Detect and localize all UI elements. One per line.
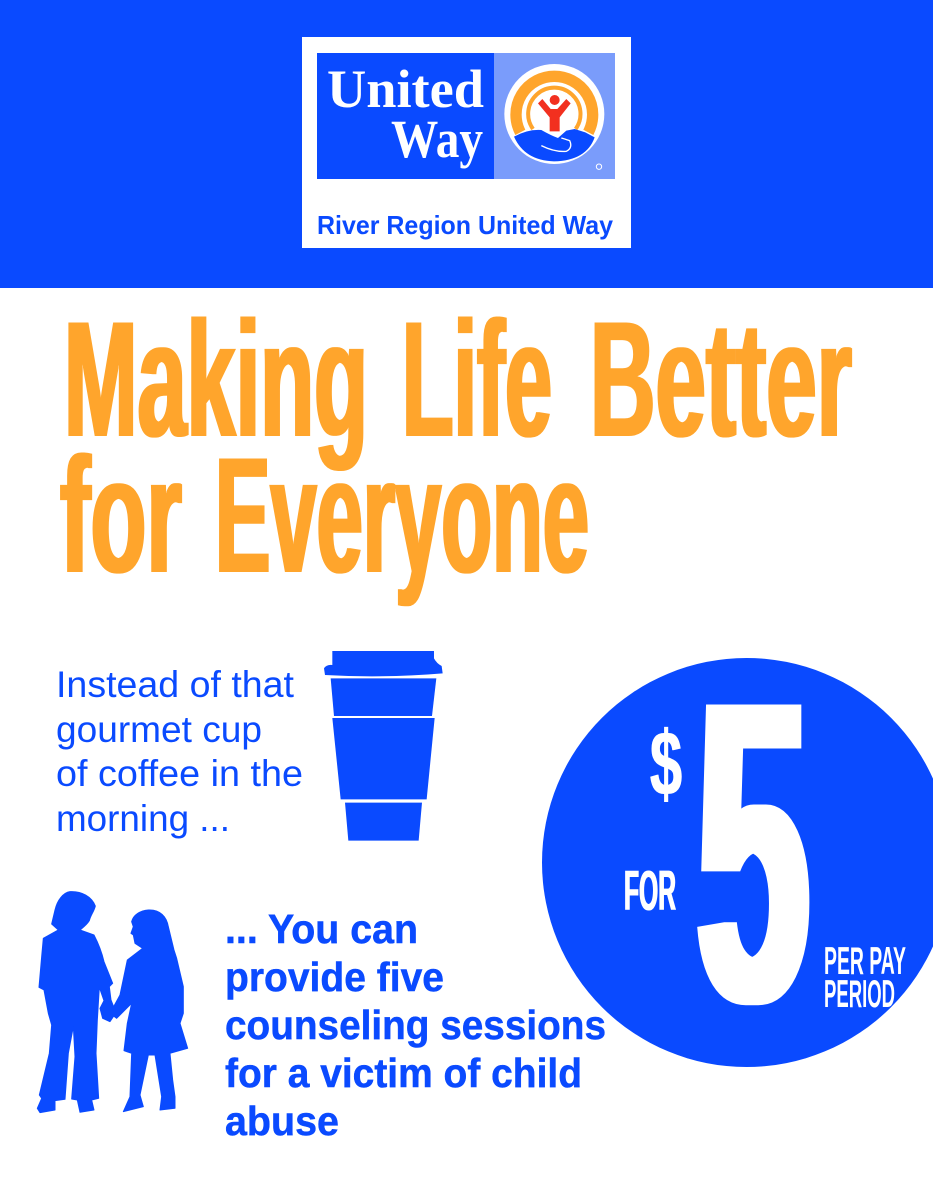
- logo wordmark panel: [317, 53, 494, 179]
- logo wordmark panel: United: [327, 59, 484, 119]
- title: Making: [64, 287, 368, 471]
- counseling text block: for a victim of child: [225, 1050, 582, 1096]
- per pay period label: [824, 940, 906, 1016]
- price circle: FOR: [624, 859, 676, 923]
- icon: coffee cup: [324, 651, 443, 841]
- coffee text block: morning ...: [56, 798, 230, 839]
- counseling text block: counseling sessions: [225, 1002, 606, 1048]
- coffee text block: Instead of that: [56, 664, 295, 705]
- icon: two children holding hands: [37, 892, 188, 1113]
- title: Life: [402, 287, 552, 471]
- coffee text block: of coffee in the: [56, 753, 303, 794]
- coffee text block: gourmet cup: [56, 709, 262, 750]
- counseling text block: ... You can: [225, 906, 418, 952]
- logo symbol panel: [494, 53, 615, 179]
- price circle: [542, 612, 933, 1093]
- counseling text block: [225, 906, 606, 1144]
- logo wordmark panel: Way: [391, 109, 483, 169]
- logo caption: River Region United Way: [317, 210, 614, 240]
- counseling text block: provide five: [225, 954, 444, 1000]
- coffee text block: [56, 664, 303, 839]
- dollar sign: $: [650, 713, 682, 815]
- title: [60, 287, 852, 607]
- header band: [0, 0, 933, 288]
- price circle: 5: [697, 612, 809, 1093]
- logo card: [302, 37, 631, 248]
- title: for: [60, 423, 182, 607]
- counseling text block: abuse: [225, 1098, 339, 1144]
